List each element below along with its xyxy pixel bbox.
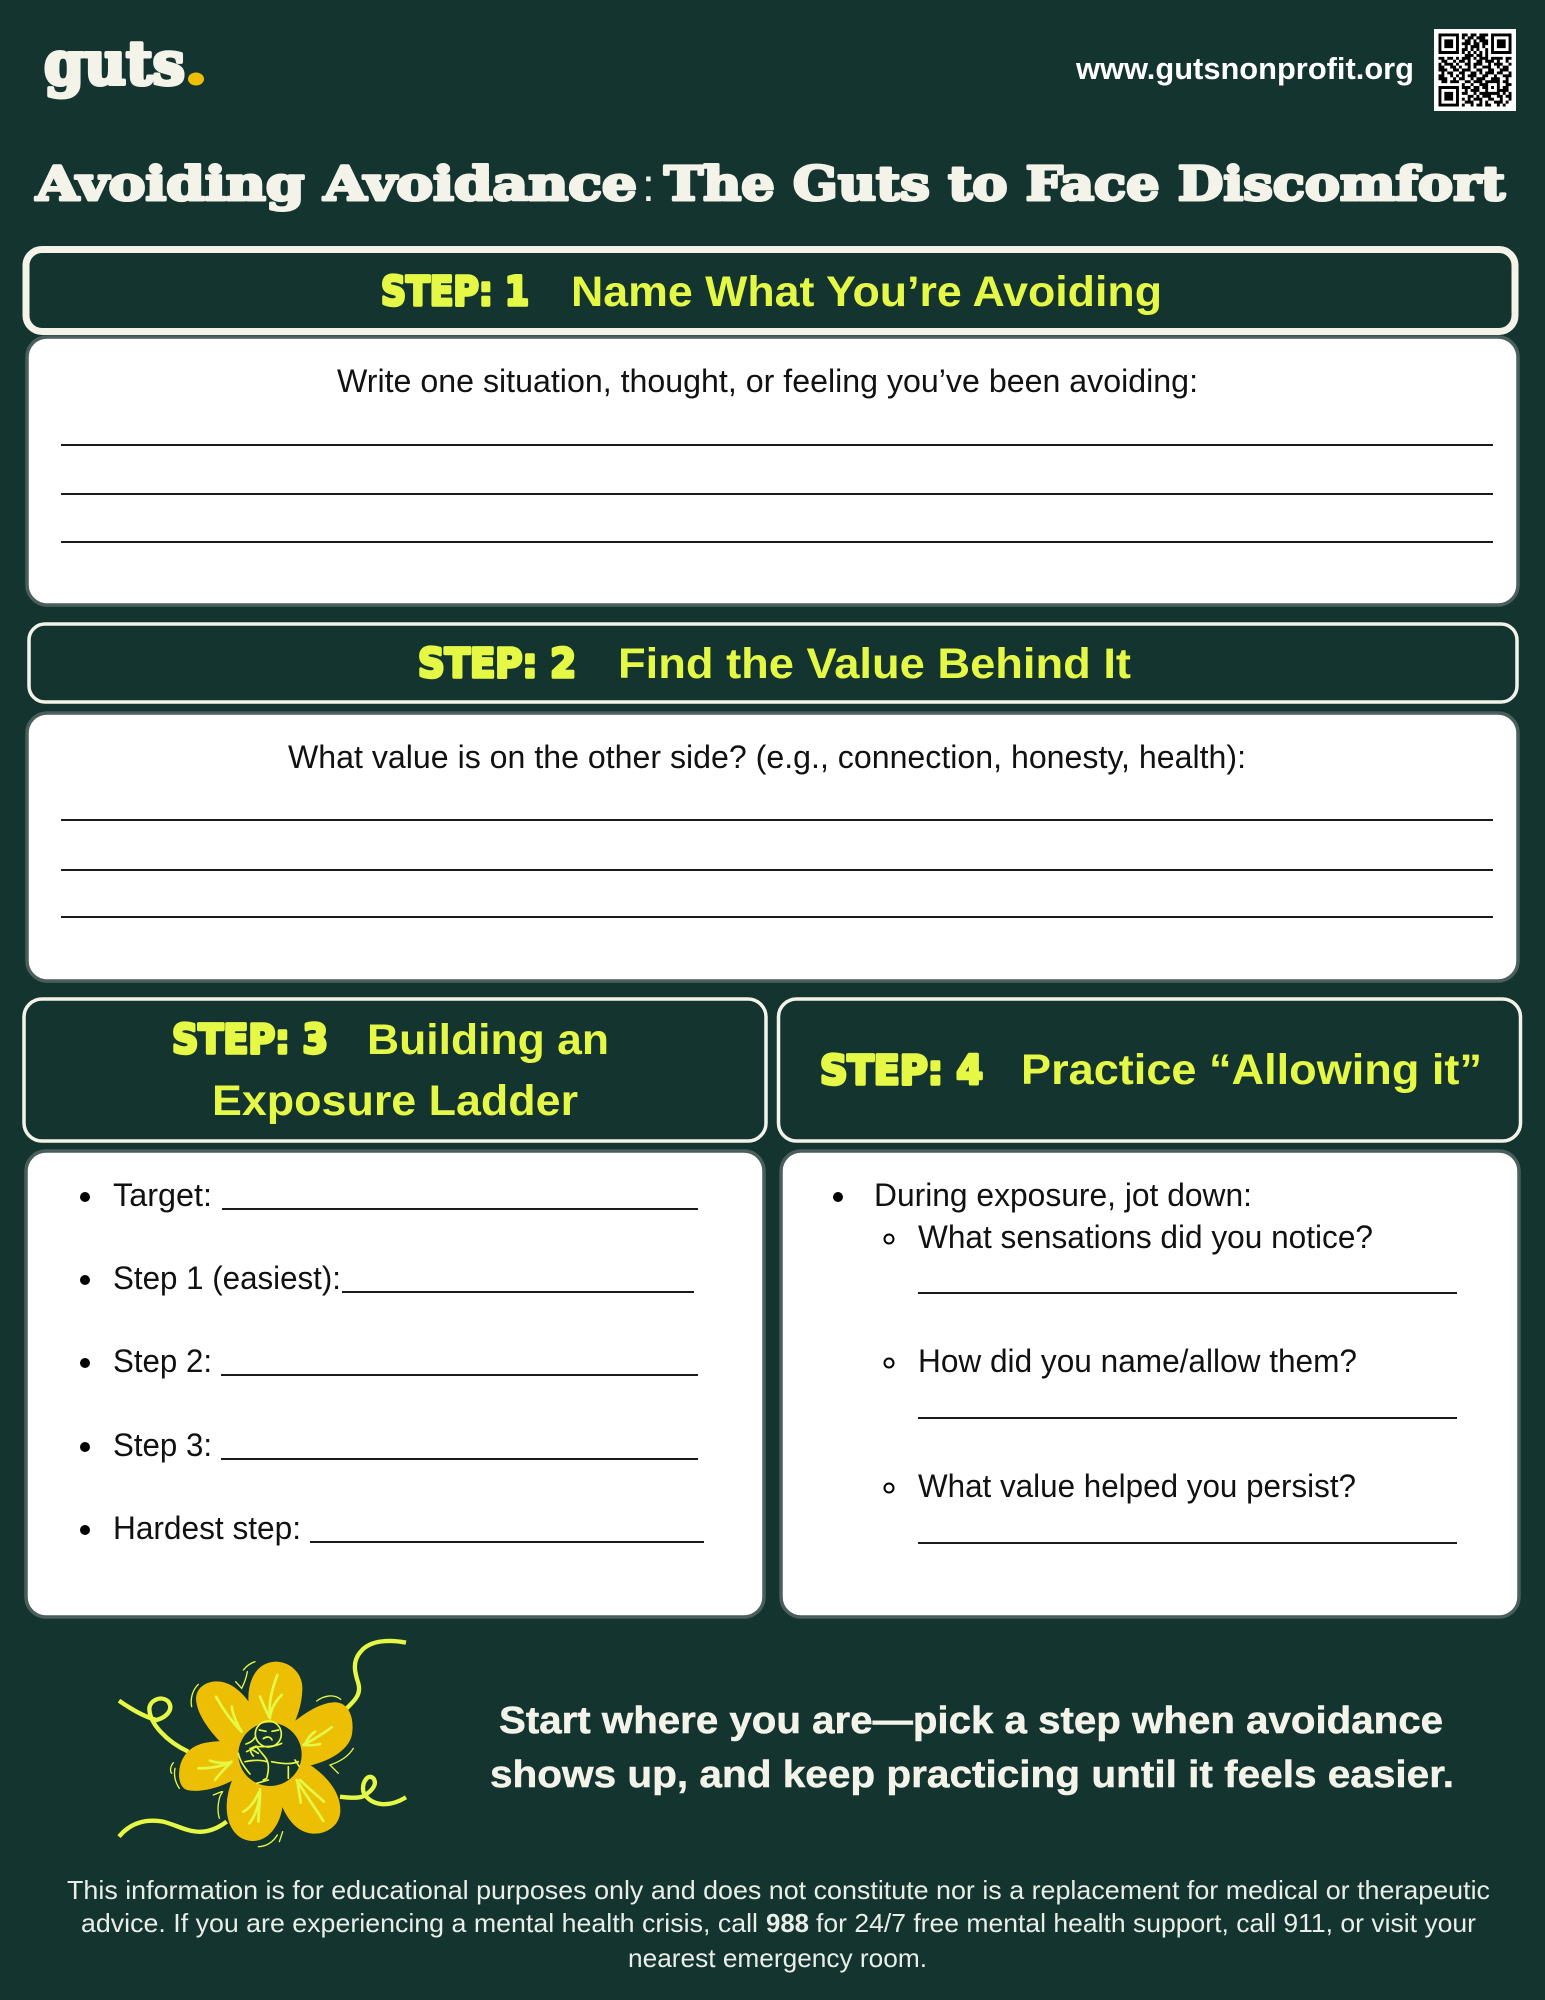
- item: step 3: Step 3:: [113, 1427, 212, 1463]
- disclaimer: nearest emergency room.: [628, 1943, 927, 1973]
- heading: step 4: [778, 999, 1520, 1141]
- heading: step 2: Find the Value Behind It: [618, 640, 1131, 688]
- sub-item: sensations: [884, 1219, 1457, 1293]
- item: step 2: [80, 1343, 698, 1379]
- title: The Guts to Face Discomfort: [664, 157, 1505, 212]
- step 1 writing lines: [61, 445, 1493, 542]
- step 1 prompt: Write one situation, thought, or feeling you’ve been avoiding:: [337, 363, 1198, 399]
- heading: step 2: STEP: 2: [418, 641, 576, 687]
- heading: step 3: Building an: [367, 1016, 609, 1064]
- disclaimer: for 24/7 free mental health support, call 911, or visit your: [816, 1908, 1476, 1938]
- icon: yellow flower with curled-up person: [119, 1641, 406, 1847]
- sub-item: sensations: What sensations did you notice?: [918, 1219, 1373, 1255]
- item: hardest step: [80, 1510, 704, 1546]
- sub-item: name and allow: How did you name/allow them?: [918, 1343, 1357, 1379]
- center circle: [238, 1723, 302, 1786]
- closing message: [490, 1700, 1454, 1796]
- item: during exposure: During exposure, jot down:: [874, 1177, 1252, 1213]
- title: [35, 157, 1505, 212]
- heading: step 4: STEP: 4: [820, 1048, 983, 1094]
- item: step 2: Step 2:: [113, 1343, 212, 1379]
- panel: step 4 allowing it: [781, 1151, 1519, 1617]
- closing message: Start where you are—pick a step when avoidance: [499, 1700, 1443, 1742]
- item: target: [80, 1177, 698, 1213]
- heading: step 1: Name What You’re Avoiding: [571, 268, 1162, 316]
- disclaimer: advice. If you are experiencing a mental health crisis, call: [81, 1908, 758, 1938]
- vines: [119, 1641, 406, 1837]
- curled-up person: [238, 1721, 299, 1783]
- title: Avoiding Avoidance: [35, 157, 637, 212]
- heading: step 4: Practice “Allowing it”: [1021, 1046, 1482, 1094]
- logo: guts.: guts: [44, 29, 185, 99]
- item: step 1 easiest: [80, 1260, 694, 1296]
- heading: step 1: STEP: 1: [381, 269, 529, 315]
- item: hardest step: Hardest step:: [113, 1510, 301, 1546]
- heading: step 3: [24, 999, 766, 1141]
- step 2 prompt: What value is on the other side? (e.g., connection, honesty, health):: [288, 739, 1246, 775]
- panel: step 2 answer box: [27, 713, 1518, 981]
- heading: step 3: Exposure Ladder: [212, 1077, 578, 1125]
- title: :: [642, 159, 655, 211]
- sub-item: name and allow: [884, 1343, 1457, 1418]
- step 2 writing lines: [61, 820, 1493, 917]
- disclaimer: This information is for educational purposes only and does not constitute nor is a replacement for medical or therapeutic: [67, 1875, 1490, 1905]
- panel: step 3 exposure ladder: [26, 1151, 764, 1617]
- petal veins and motion marks: [171, 1662, 353, 1847]
- sub-item: value: What value helped you persist?: [918, 1468, 1356, 1504]
- item: target: Target:: [113, 1177, 212, 1213]
- heading: step 3: STEP: 3: [172, 1017, 328, 1063]
- item: step 1 easiest: Step 1 (easiest):: [113, 1260, 341, 1296]
- heading: step 2: [29, 624, 1517, 702]
- item: step 3: [80, 1427, 698, 1463]
- petals: [181, 1663, 351, 1839]
- panel: step 1 answer box: [27, 337, 1518, 605]
- closing message: shows up, and keep practicing until it feels easier.: [490, 1754, 1454, 1796]
- disclaimer: [67, 1875, 1490, 1973]
- disclaimer: 988: [766, 1908, 809, 1938]
- heading: step 1: [26, 250, 1515, 332]
- icon: qr code: [1434, 29, 1516, 111]
- sub-item: value: [884, 1468, 1457, 1543]
- website url: www.gutsnonprofit.org: [1075, 51, 1414, 86]
